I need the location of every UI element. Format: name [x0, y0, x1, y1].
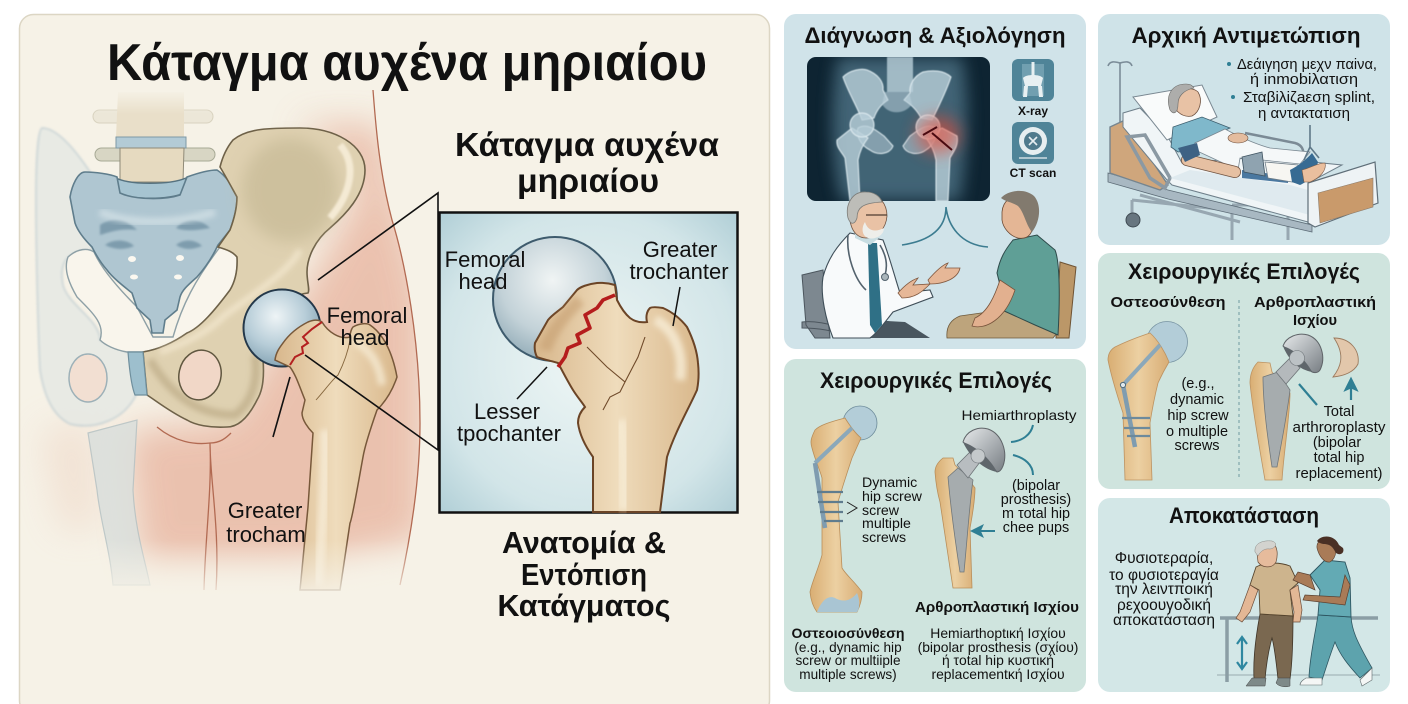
rehabilitation text: το φυσιοτεραγία [1109, 567, 1219, 584]
prosthesis labels: prosthesis) [1001, 492, 1071, 508]
heading: Χειρουργικές Επιλογές [820, 368, 1052, 393]
double arrow [1237, 637, 1247, 669]
sacrum [70, 170, 237, 333]
bullet text: Σταβiλiζaεση splint, [1243, 90, 1375, 106]
screw labels [862, 475, 923, 546]
rehabilitation text: Φυσιοτεραρία, [1115, 550, 1213, 567]
sacral details [100, 212, 215, 280]
head section rail [1127, 135, 1170, 188]
patient gown [1171, 117, 1230, 152]
caption: anatomy and location: Κατάγματος [498, 588, 670, 623]
x-ray image [807, 57, 990, 201]
left pelvis faded [36, 128, 150, 585]
plate caption: hip screw [1167, 408, 1229, 424]
pillow [1133, 85, 1217, 140]
hand on belly [1228, 133, 1248, 143]
total arthroplasty label: Total [1324, 404, 1354, 420]
bullet text: ή inmobiλατιση [1250, 72, 1358, 88]
osteosynthesis femur [810, 406, 877, 612]
femur with plate [1108, 322, 1188, 480]
caption: anatomy and location: Εντόπιση [521, 557, 647, 592]
acetabular cup [1333, 338, 1358, 377]
heading: hip arthroplasty: Αρθροπλαστική [1254, 294, 1376, 311]
bed frame rail [1108, 173, 1312, 232]
patient shirt [997, 235, 1059, 335]
osteosynthesis caption [792, 626, 904, 682]
doctor head [849, 194, 887, 238]
total arthroplasty label: (bipolar [1313, 435, 1361, 451]
heading: Αρχική Αντιμετώπιση [1132, 23, 1360, 48]
label: x-ray: X-ray [1018, 104, 1048, 118]
arthroplasty caption: ή τotal hip κυστική [942, 652, 1054, 668]
ilium shading [150, 138, 350, 415]
zoom connector lines [305, 193, 438, 450]
osteosynthesis caption: Οστεοιοσύνθεση [792, 626, 904, 641]
caption: anatomy and location: Ανατομία & [502, 525, 666, 560]
osteosynthesis caption: screw or multiiple [796, 653, 900, 668]
subtitle: Κάταγμα αυχένα [455, 127, 719, 164]
plate caption: screws [1174, 438, 1220, 454]
doctor hands [898, 263, 960, 298]
heading: hip arthroplasty: Ισχίου [1293, 312, 1337, 329]
arthroplasty caption: replacementκή Ισχίου [931, 666, 1065, 682]
stethoscope [848, 235, 886, 290]
panel: initial treatment [1098, 14, 1390, 245]
patient walking [1236, 541, 1302, 687]
screw labels: hip screw [862, 489, 923, 505]
label: femoral head: Femoral [327, 303, 407, 328]
inset label: lesser trochanter [457, 399, 561, 446]
mattress [1123, 108, 1342, 222]
rehabilitation text: αποκατάσταση [1113, 612, 1215, 629]
arthroplasty caption: (bipolar prosthesis (σχίου) [918, 639, 1078, 655]
patient head [1002, 196, 1037, 238]
lower bed frame [1132, 195, 1288, 240]
screw labels: screws [862, 530, 906, 546]
label: greater trocham: Greater [228, 498, 302, 523]
screw labels: multiple [862, 516, 911, 532]
obturator foramen [174, 346, 226, 404]
pubic symphysis [128, 352, 147, 395]
label: ct scan: CT scan [1010, 166, 1056, 180]
inset fracture [558, 295, 615, 367]
plate caption: o multiple [1166, 424, 1228, 440]
body contour lines [157, 90, 420, 590]
patient forearm fill [1187, 160, 1235, 172]
traction sling [1290, 153, 1318, 185]
doctor coat [822, 233, 933, 338]
caption: anatomy and location [498, 525, 670, 623]
wheel [1126, 213, 1140, 227]
patient head [1172, 89, 1200, 116]
arthroplasty caption: Hemiarthoptική Ισχίου [930, 625, 1066, 641]
panel: diagnosis [784, 14, 1086, 349]
panel: surgical options lower [784, 359, 1086, 692]
label: femoral head [327, 303, 407, 350]
sheet shading [1170, 170, 1310, 215]
heading: Αποκατάσταση [1169, 503, 1319, 528]
icon: x-ray [1012, 59, 1054, 101]
rehabilitation text: την λειντποική [1115, 581, 1213, 598]
hospital bed illustration [1108, 62, 1378, 240]
total hip implant [1250, 334, 1323, 480]
implant arrows [974, 425, 1033, 531]
total arthroplasty label: replacement) [1296, 466, 1382, 482]
leg brace base [1242, 170, 1288, 183]
label: femoral head: head [341, 325, 389, 350]
inset label: femoral head [445, 247, 525, 294]
footboard [1308, 162, 1378, 227]
heading: hip arthroplasty: Αρθροπλαστική Ισχίου [915, 600, 1079, 616]
doctor figure [802, 192, 960, 338]
heading: Διάγνωση & Αξιολόγηση [804, 23, 1066, 48]
pelvic opening [66, 247, 237, 352]
inset label: lesser trochanter: Lesser [474, 399, 540, 424]
patient forearm [1187, 160, 1235, 172]
inset label: femoral head: head [459, 269, 507, 294]
inset label: greater trochanter: Greater [643, 237, 717, 262]
screw labels: Dynamic [862, 475, 917, 491]
label: greater trocham [226, 498, 306, 547]
patient trousers [947, 310, 1057, 338]
screw labels: screw [862, 503, 900, 519]
patient figure [947, 191, 1076, 338]
inset secondary cracks [587, 337, 645, 410]
inset label: femoral head: Femoral [445, 247, 525, 272]
hemiarthroplasty implant [935, 428, 1005, 588]
heading: Χειρουργικές Επιλογές [1128, 259, 1360, 284]
inset: fracture close-up [440, 212, 738, 512]
total arthroplasty label: arthroroplasty [1292, 420, 1386, 436]
inset femur [535, 283, 699, 512]
arthroplasty caption [918, 625, 1078, 682]
plate caption [1166, 376, 1229, 454]
consultation arrows [902, 207, 988, 247]
inset label: lesser trochanter: tpochanter [457, 421, 561, 446]
hip anatomy illustration [22, 90, 442, 602]
divider [1238, 300, 1240, 478]
doctor trousers [868, 320, 930, 338]
left femur faded [88, 420, 150, 585]
title: Κάταγμα αυχένα μηριαίου [107, 34, 707, 92]
patient chair [1056, 262, 1076, 338]
prosthesis labels [1001, 478, 1071, 536]
sleeve band [1178, 143, 1200, 162]
panel: rehabilitation [1098, 498, 1390, 692]
inset label: greater trochanter: trochanter [629, 259, 729, 284]
right ilium and pubis [143, 128, 365, 427]
total arthroplasty label [1292, 404, 1386, 482]
label: greater trocham: trocham [226, 522, 306, 547]
plate caption: dynamic [1170, 392, 1224, 408]
subtitle [455, 127, 719, 200]
femoral head [244, 290, 320, 366]
bullet text: Δεάιγηση μεχν παiνα, [1237, 57, 1377, 73]
plate caption: (e.g., [1181, 376, 1215, 392]
side rail [1245, 133, 1303, 155]
inset femoral head [493, 237, 617, 361]
doctor chair [802, 270, 852, 338]
panel: surgical options right [1098, 253, 1390, 489]
implant arrows [1299, 381, 1351, 405]
heading: osteosynthesis: Οστεοσύνθεση [1110, 294, 1226, 311]
prosthesis labels: (bipolar [1012, 478, 1060, 494]
rehabilitation text: ρεχοουγοδική [1117, 597, 1211, 614]
panel: main anatomy [20, 14, 770, 704]
label: hemiarthroplasty: Hemiarthroplasty [962, 407, 1076, 423]
leader: greater trocham [273, 377, 290, 437]
prosthesis labels: m τotal hip [1002, 506, 1070, 522]
femur shading [316, 340, 382, 585]
total arthroplasty label: total hip [1314, 450, 1364, 466]
bullet text [1227, 57, 1377, 122]
bottom fade [22, 540, 442, 602]
doctor tie [868, 243, 882, 333]
spine upper vertebra [85, 90, 220, 198]
right femur [275, 320, 397, 590]
subtitle: μηριαίου [517, 163, 659, 200]
bullet text: η αντακτατιση [1258, 106, 1350, 122]
head end panel [1110, 120, 1168, 190]
icon: ct scan [1012, 122, 1054, 164]
heading: hip arthroplasty [1254, 294, 1376, 329]
inset label: greater trochanter [629, 237, 729, 284]
foot [1302, 163, 1325, 182]
inset leaders [517, 287, 680, 399]
osteosynthesis caption: (e.g., dynamic hip [794, 640, 902, 655]
skin tone background [40, 125, 425, 565]
osteosynthesis caption: multiple screws) [799, 667, 897, 682]
rehabilitation text [1109, 550, 1219, 629]
fracture line [290, 322, 322, 365]
parallel bar and floor [1217, 618, 1380, 682]
prosthesis labels: chee pups [1003, 520, 1069, 536]
iv pole [1108, 62, 1132, 177]
leg brace [1242, 152, 1265, 176]
blanket [1195, 129, 1310, 170]
chevron pointer [847, 502, 857, 514]
therapist [1293, 536, 1372, 686]
bandaged lower leg [1265, 162, 1304, 183]
inset bone shading [545, 300, 681, 510]
patient arm [972, 280, 1015, 327]
